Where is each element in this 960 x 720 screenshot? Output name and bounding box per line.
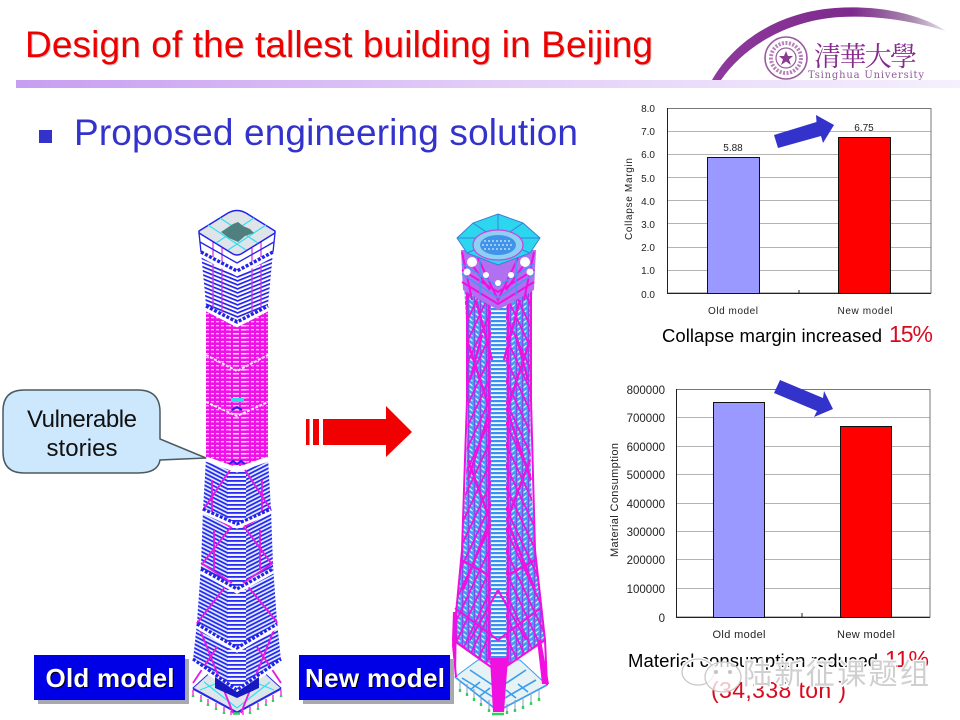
tower faces	[453, 265, 545, 672]
bar chart: material consumption	[609, 385, 930, 641]
axis labels: 1.0	[641, 266, 655, 277]
logo: Tsinghua University: Tsinghua University	[808, 70, 924, 81]
callout: vulnerable stories: Vulnerable	[27, 406, 137, 433]
bar chart: collapse margin: 6.75	[854, 123, 874, 134]
lattice crown	[461, 250, 536, 310]
axis labels: 500000	[627, 470, 665, 482]
roof crown	[457, 214, 540, 265]
axis labels: 3.0	[641, 220, 655, 231]
caption: collapse margin: 15%	[889, 321, 933, 347]
upper section	[201, 242, 273, 325]
callout: vulnerable stories	[3, 390, 206, 473]
bar chart: collapse margin: Old model	[708, 306, 758, 317]
bar: old model	[708, 158, 760, 294]
bar chart: material consumption: New model	[837, 629, 895, 641]
caption: material consumption: (34,338 ton )	[711, 677, 846, 703]
bar: new model	[840, 426, 892, 618]
core at base	[215, 677, 259, 698]
axis labels: 100000	[627, 584, 665, 596]
old model tower	[193, 210, 281, 715]
magenta bracing	[452, 285, 549, 712]
axis labels: 6.0	[641, 150, 655, 161]
watermark: WeChat research group: 陆新征课题组	[743, 658, 929, 691]
callout: vulnerable stories: stories	[46, 435, 118, 462]
base platform	[455, 660, 547, 714]
axis labels: 600000	[627, 442, 665, 454]
bar chart: collapse margin: Collapse Margin	[624, 158, 635, 240]
label: new model: New model	[305, 663, 445, 693]
label: new model	[299, 655, 454, 704]
bar chart: material consumption: Old model	[712, 629, 766, 641]
logo: Tsinghua University: 清華大學	[814, 35, 917, 74]
arrow: material consumption decrease	[774, 380, 833, 417]
axis labels: 2.0	[641, 243, 655, 254]
axis labels: 7.0	[641, 127, 655, 138]
bar: new model	[838, 138, 890, 294]
bar: old model	[714, 402, 764, 618]
axis labels: 0.0	[641, 290, 655, 301]
bar chart: collapse margin: New model	[838, 306, 892, 317]
logo: Tsinghua University	[712, 7, 946, 81]
axis labels: 5.0	[641, 174, 655, 185]
caption: collapse margin	[662, 321, 933, 347]
axis labels	[627, 385, 665, 625]
arrow: old to new	[306, 406, 412, 457]
axis labels: 200000	[627, 555, 665, 567]
roof	[199, 210, 275, 263]
title underline band	[16, 80, 960, 88]
bar chart: material consumption: Material Consumption	[609, 443, 621, 557]
heading: proposed engineering solution: Proposed engineering solution	[74, 112, 578, 153]
label: old model	[34, 655, 189, 704]
axis labels: 8.0	[641, 104, 655, 115]
lower section	[193, 458, 281, 713]
caption: collapse margin: Collapse margin increased	[662, 325, 882, 346]
floor bands	[193, 252, 281, 692]
caption: material consumption	[628, 646, 929, 703]
bar chart: collapse margin: 5.88	[723, 143, 743, 154]
title: Design of the tallest building in Beijing	[25, 24, 653, 65]
tower base	[193, 668, 281, 715]
axis labels: 800000	[627, 385, 665, 397]
bar chart: collapse margin	[624, 104, 931, 317]
axis labels: 4.0	[641, 197, 655, 208]
axis labels: 0	[659, 613, 665, 625]
axis labels: 700000	[627, 413, 665, 425]
caption: material consumption: 11%	[885, 646, 929, 672]
new model tower	[452, 214, 549, 714]
axis labels: 400000	[627, 499, 665, 511]
label: old model: Old model	[46, 663, 174, 693]
axis labels: 300000	[627, 527, 665, 539]
icon: university seal	[765, 37, 807, 79]
vulnerable magenta section	[206, 308, 268, 472]
arrow: collapse margin increase	[774, 115, 834, 148]
axis labels	[641, 104, 655, 301]
caption: material consumption: Material consumption reduced	[628, 650, 878, 671]
